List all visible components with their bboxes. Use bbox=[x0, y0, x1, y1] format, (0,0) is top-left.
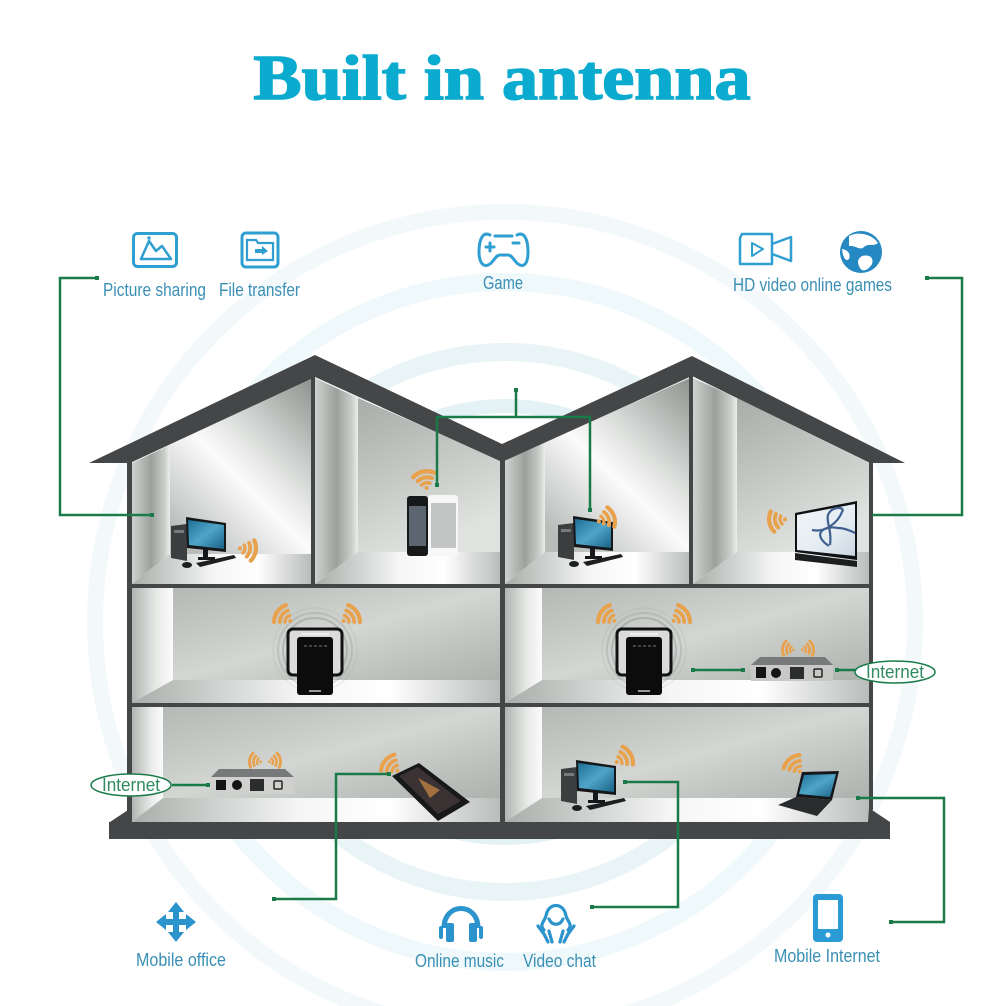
internet label, right bbox=[855, 661, 935, 683]
device: router, right bbox=[751, 641, 833, 681]
icon: headphones bbox=[439, 908, 483, 942]
device: desktop computer, lower right bbox=[561, 745, 636, 811]
label: game: Game bbox=[483, 273, 523, 293]
label: video chat: Video chat bbox=[523, 951, 596, 971]
label: picture sharing: Picture sharing bbox=[103, 280, 206, 300]
roof bbox=[89, 355, 905, 463]
room backgrounds bbox=[132, 378, 869, 822]
device: desktop computer, upper room 3 bbox=[558, 506, 623, 567]
label: mobile office: Mobile office bbox=[136, 950, 226, 970]
connector end dots bbox=[95, 276, 929, 924]
background signal rings bbox=[95, 212, 915, 1006]
label: online music: Online music bbox=[415, 951, 504, 971]
icon: picture sharing bbox=[134, 234, 176, 266]
label: file transfer: File transfer bbox=[219, 280, 300, 300]
device: wifi extender, left bbox=[271, 603, 363, 695]
device: desktop computer, upper left bbox=[171, 517, 257, 568]
label: hd video online games: HD video online games bbox=[733, 275, 892, 295]
device: wifi extender, right bbox=[595, 603, 693, 695]
icon: video camera bbox=[740, 234, 791, 264]
icon: file transfer bbox=[242, 233, 278, 267]
internet label, right: Internet bbox=[866, 662, 924, 682]
internet label, left bbox=[91, 774, 171, 796]
device: router, left bbox=[211, 753, 294, 794]
icon: video chat bbox=[538, 906, 574, 942]
house bbox=[89, 355, 905, 839]
icon: globe bbox=[840, 231, 882, 273]
device: television bbox=[768, 501, 857, 567]
device: tablet bbox=[379, 753, 470, 821]
walls and floors bbox=[109, 370, 890, 839]
device: smartphones bbox=[407, 469, 458, 556]
label: mobile internet: Mobile Internet bbox=[774, 946, 880, 966]
device: laptop bbox=[778, 753, 839, 816]
icon: game controller bbox=[479, 234, 528, 265]
title: Built in antenna bbox=[254, 42, 750, 113]
icon: mobile office arrows bbox=[156, 902, 196, 942]
connector lines bbox=[60, 278, 962, 922]
icon: mobile phone bbox=[813, 894, 843, 942]
internet label, left: Internet bbox=[102, 775, 160, 795]
